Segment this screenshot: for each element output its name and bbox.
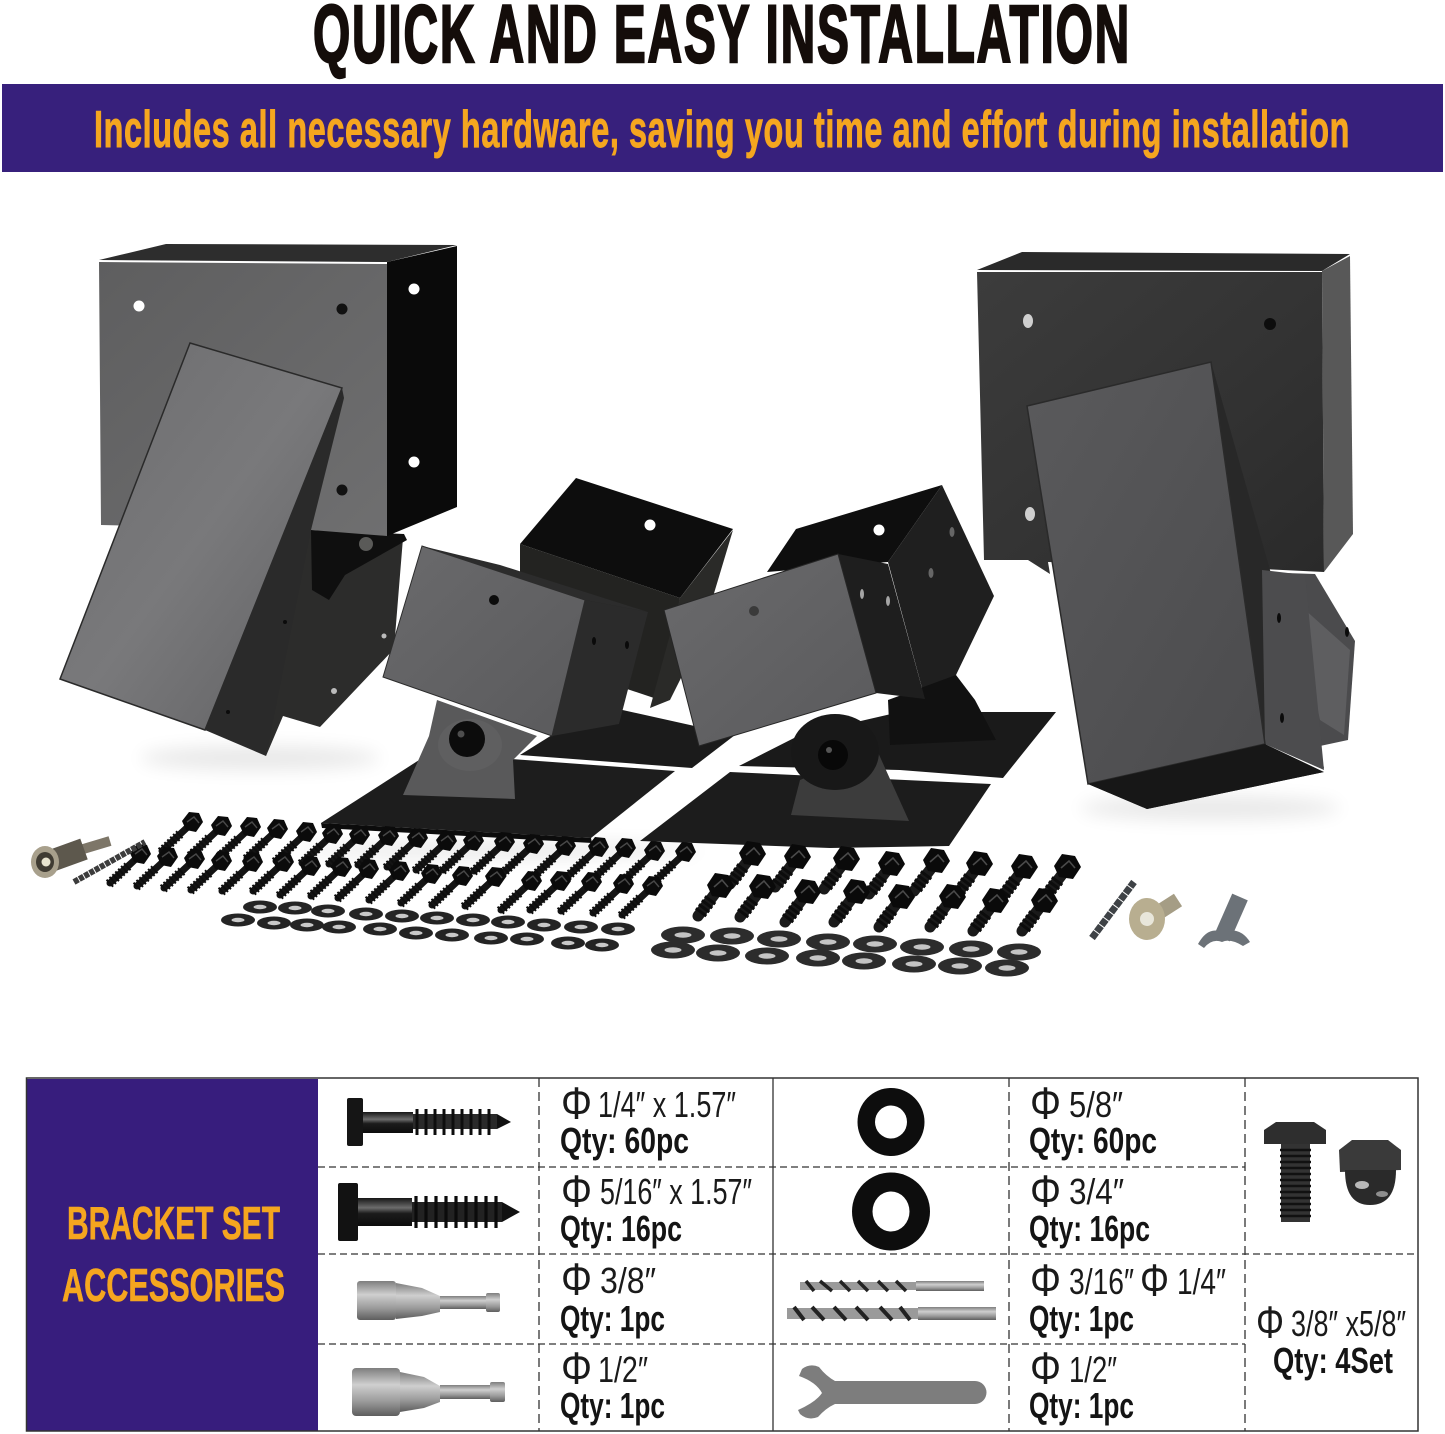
hardware: lag screws, right group (698, 841, 1081, 931)
icon: half-inch nut driver (352, 1368, 505, 1416)
label: three-quarter washer: Φ (1030, 1166, 1061, 1217)
label: five-sixteenth lag screw: Φ (561, 1166, 592, 1217)
hardware: drill bit, nut driver and wrench, right (1092, 882, 1250, 948)
hardware: washers, right group (651, 926, 1041, 976)
icon: three-eighth nut driver (357, 1281, 500, 1320)
photo: centre-right rear base plate (739, 712, 1056, 778)
photo: centre-left rear base plate (520, 705, 735, 768)
photo: big swivel bracket, left (60, 244, 457, 756)
hardware: lag screws, left group (109, 812, 696, 916)
label: five-eighth washer: Qty: 60pc (1029, 1120, 1157, 1161)
label: half-inch nut driver: Qty: 1pc (560, 1385, 665, 1426)
label: wrench (1029, 1343, 1134, 1426)
label: hex bolt and cap nut: Qty: 4Set (1273, 1340, 1393, 1381)
label: drill bits: 1/4″ (1177, 1261, 1226, 1302)
label: hex bolt and cap nut (1256, 1297, 1406, 1381)
label: wrench: Φ (1030, 1343, 1061, 1394)
table: side heading: ACCESSORIES (62, 1259, 285, 1311)
hardware: nut driver and drill bit, left (31, 841, 145, 882)
label: wrench: Qty: 1pc (1029, 1385, 1134, 1426)
label: five-eighth washer (1029, 1078, 1157, 1161)
icon: five-eighth washer (858, 1088, 924, 1156)
icon: drill bits (787, 1281, 996, 1320)
photo: centre-left pivot and bolt (403, 700, 537, 799)
label: three-quarter washer: Qty: 16pc (1029, 1208, 1150, 1249)
photo: centre-right pivot and bolt (791, 714, 909, 821)
label: half-inch nut driver: Φ (561, 1343, 592, 1394)
label: drill bits (1029, 1255, 1226, 1339)
photo: centre-right front base plate (640, 772, 991, 848)
icon: hex bolt and cap nut (1264, 1122, 1401, 1222)
label: five-sixteenth lag screw (560, 1166, 752, 1249)
photo: centre-left rear open box (520, 478, 733, 708)
icon: five-sixteenth lag screw (338, 1183, 520, 1241)
label: five-sixteenth lag screw: 5/16″ x 1.57″ (600, 1171, 752, 1212)
soft floor shadows (140, 746, 1340, 858)
label: quarter-inch lag screw: 1/4″ x 1.57″ (598, 1084, 736, 1125)
photo: centre-right front box (664, 554, 925, 746)
label: quarter-inch lag screw: Φ (561, 1078, 592, 1129)
label: drill bits: 3/16″ (1069, 1261, 1134, 1302)
label: quarter-inch lag screw: Qty: 60pc (560, 1120, 689, 1161)
label: drill bits: Qty: 1pc (1029, 1298, 1134, 1339)
label: hex bolt and cap nut: Φ (1256, 1297, 1284, 1348)
icon: quarter-inch lag screw (347, 1098, 511, 1146)
label: three-quarter washer: 3/4″ (1069, 1171, 1124, 1212)
label: wrench: 1/2″ (1069, 1349, 1117, 1390)
hardware: washers, left group (221, 900, 635, 952)
label: hex bolt and cap nut: 3/8″ x5/8″ (1291, 1303, 1406, 1344)
label: five-eighth washer: 5/8″ (1069, 1084, 1123, 1125)
label: five-sixteenth lag screw: Qty: 16pc (560, 1208, 682, 1249)
icon: three-quarter washer (852, 1172, 930, 1250)
photo: centre-left front base plate (321, 753, 675, 843)
photo: centre-left front box (383, 546, 648, 736)
label: three-eighth nut driver (560, 1254, 665, 1339)
label: three-quarter washer (1029, 1166, 1150, 1249)
label: half-inch nut driver (560, 1343, 665, 1426)
photo: big swivel bracket, right (977, 252, 1355, 809)
label: three-eighth nut driver: 3/8″ (600, 1260, 656, 1301)
label: five-eighth washer: Φ (1030, 1078, 1061, 1129)
label: drill bits: Φ (1140, 1255, 1169, 1306)
label: three-eighth nut driver: Φ (561, 1254, 592, 1305)
parts table (26, 1078, 1418, 1431)
icon: wrench (798, 1365, 986, 1418)
photo: centre-right rear open box (767, 485, 996, 745)
label: quarter-inch lag screw (560, 1078, 736, 1161)
label: drill bits: Φ (1030, 1255, 1061, 1306)
label: half-inch nut driver: 1/2″ (598, 1349, 648, 1390)
table: side heading: BRACKET SET (67, 1197, 280, 1249)
banner: subtitle (2, 84, 1443, 172)
table: side heading (27, 1079, 318, 1431)
label: three-eighth nut driver: Qty: 1pc (560, 1298, 665, 1339)
